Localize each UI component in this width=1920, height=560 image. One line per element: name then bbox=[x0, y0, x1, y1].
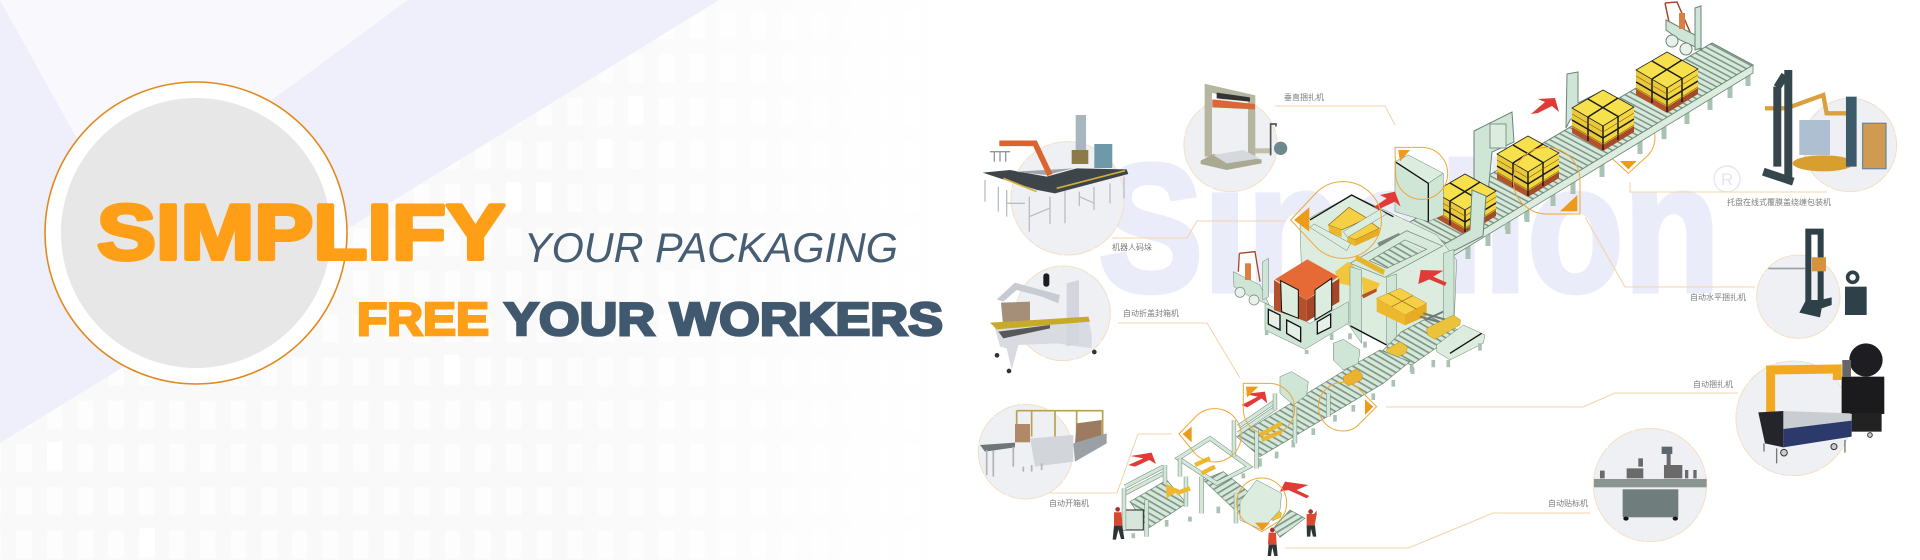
wrapped load bbox=[1799, 120, 1830, 155]
exit table bbox=[1273, 510, 1305, 537]
corner callout ring bbox=[1513, 147, 1580, 214]
callout ring with corner bbox=[1395, 147, 1448, 199]
yellow frame bbox=[1017, 411, 1103, 437]
reel bbox=[1849, 343, 1883, 377]
columns bbox=[1124, 393, 1328, 537]
cross bed bbox=[1203, 472, 1250, 517]
label: auto strapping: 自动捆扎机 bbox=[1693, 379, 1733, 389]
black base line bbox=[1351, 326, 1387, 345]
strapping frame b bbox=[1474, 112, 1514, 238]
gripper bbox=[990, 152, 1010, 162]
background: pale grid panel bbox=[0, 0, 1000, 560]
arm bbox=[1255, 148, 1272, 153]
product: horizontal strapping machine bbox=[1757, 232, 1867, 338]
side table black rail bbox=[1450, 333, 1482, 353]
output conveyor bbox=[1380, 317, 1462, 365]
callout ring a bbox=[1179, 409, 1241, 462]
monitor bbox=[1662, 447, 1672, 454]
dark side bbox=[1758, 411, 1783, 447]
table bbox=[1213, 150, 1260, 163]
yellow arch bbox=[1771, 369, 1837, 417]
control panel bbox=[1842, 360, 1851, 377]
lower conveyor line bbox=[1113, 339, 1413, 556]
base bbox=[1201, 154, 1262, 170]
body bbox=[1030, 435, 1073, 467]
leader lines bbox=[1050, 106, 1827, 548]
title: free: FREE bbox=[357, 293, 489, 345]
white rail left bbox=[1310, 224, 1351, 251]
cabinet bbox=[1623, 489, 1678, 517]
table centre bbox=[1015, 168, 1073, 175]
central stacking cell bbox=[1233, 147, 1526, 372]
pallet 3 bbox=[1572, 90, 1634, 151]
base bbox=[1072, 150, 1088, 164]
worker right bbox=[1307, 509, 1317, 537]
wheels bbox=[995, 350, 1097, 373]
flap carton bbox=[1075, 420, 1102, 443]
frame bbox=[1208, 88, 1252, 157]
output legs bbox=[1350, 333, 1480, 372]
stacker back plate bbox=[1300, 195, 1457, 350]
label: robot palletizing: 机器人码垛 bbox=[1112, 242, 1152, 252]
arm bbox=[1765, 95, 1850, 113]
feed unit bbox=[1280, 372, 1308, 405]
legs bbox=[987, 447, 1042, 477]
yellow rail bbox=[990, 317, 1090, 329]
blue body bbox=[1783, 421, 1852, 447]
background: light triangle bbox=[0, 0, 408, 213]
legs bbox=[985, 177, 1124, 232]
product: case sealer bbox=[990, 266, 1110, 373]
red arrow c bbox=[1280, 482, 1309, 498]
column bbox=[1350, 267, 1362, 343]
stacker rollers bbox=[1368, 237, 1423, 270]
small box group bbox=[1427, 315, 1461, 339]
product: case erector bbox=[978, 404, 1107, 499]
stacker gripper shadow bbox=[1378, 235, 1400, 245]
left column bbox=[1763, 70, 1793, 182]
red arrow b bbox=[1242, 392, 1267, 407]
callout ring d bbox=[1237, 478, 1287, 532]
rollers bbox=[998, 325, 1050, 338]
pallet store base bbox=[1265, 302, 1348, 349]
wall body bbox=[995, 320, 1092, 370]
column bbox=[1387, 274, 1397, 347]
product: vertical strapping machine bbox=[1184, 88, 1287, 192]
callout ring c bbox=[1318, 382, 1377, 431]
black lower bbox=[1852, 413, 1882, 432]
watermark: registered mark bbox=[1714, 166, 1740, 192]
upper dark bbox=[1043, 273, 1049, 287]
red arrow lower bbox=[1418, 270, 1447, 286]
base bbox=[1799, 297, 1832, 317]
background: lavender diagonal band bbox=[0, 0, 719, 443]
cabinet bbox=[1094, 144, 1112, 168]
wheels bbox=[1781, 433, 1872, 456]
subtitle: your packaging: YOUR PACKAGING bbox=[524, 224, 898, 271]
dispenser post bbox=[1271, 124, 1276, 155]
head bbox=[1812, 257, 1826, 271]
pallet 2 bbox=[1497, 136, 1559, 197]
cabinet bbox=[1845, 287, 1867, 315]
conveyor bed bbox=[1388, 43, 1753, 262]
red arrow bbox=[1531, 98, 1559, 114]
pallet stack bbox=[1274, 259, 1339, 322]
red arrow a bbox=[1128, 453, 1156, 467]
label: auto labeling: 自动贴标机 bbox=[1548, 498, 1588, 508]
red arrow upper bbox=[1373, 192, 1401, 209]
forklift bbox=[1665, 2, 1702, 55]
black body bbox=[1842, 377, 1884, 414]
label: vertical strapping: 垂直捆扎机 bbox=[1284, 92, 1324, 102]
circle emblem bbox=[45, 82, 347, 384]
frame bbox=[1808, 232, 1821, 310]
feed unit 2 bbox=[1333, 339, 1360, 370]
carton bbox=[1015, 424, 1030, 442]
callout ring behind pallet bbox=[1602, 111, 1655, 173]
table bbox=[1768, 268, 1805, 269]
lower boxes bbox=[1377, 288, 1427, 325]
column bbox=[1067, 280, 1079, 347]
column bbox=[1076, 115, 1086, 153]
out slope bbox=[1073, 433, 1107, 462]
small box on line bbox=[1387, 342, 1407, 358]
strapping post a bbox=[1566, 72, 1600, 128]
reel bbox=[1848, 272, 1858, 282]
boxes upper bbox=[1328, 207, 1379, 246]
product: pallet wrapper bbox=[1763, 70, 1897, 192]
callout ring b bbox=[1243, 383, 1295, 435]
upper arm bbox=[997, 283, 1060, 303]
carton bbox=[1343, 368, 1363, 386]
turntable bbox=[1793, 155, 1854, 171]
left bed bbox=[1130, 480, 1187, 528]
upper conveyor line bbox=[1388, 2, 1753, 270]
legs bbox=[1764, 440, 1845, 463]
watermark: brand name: Sinolion bbox=[1098, 126, 1720, 330]
labeler unit bbox=[1240, 480, 1282, 530]
robot arm bbox=[999, 143, 1050, 175]
pallet 4 bbox=[1636, 52, 1698, 113]
product: auto strapping machine bbox=[1736, 343, 1884, 476]
wrapper tower bbox=[1395, 155, 1443, 222]
legs bbox=[1133, 367, 1413, 538]
feet bbox=[1623, 517, 1678, 521]
machine frame front bbox=[1430, 190, 1486, 258]
gripper fork bbox=[1420, 312, 1447, 323]
head dark bbox=[1217, 93, 1250, 102]
callout ring with pointer bbox=[1291, 182, 1381, 258]
small carton bbox=[1267, 508, 1282, 521]
stacker top frame bbox=[1310, 195, 1393, 220]
worker front bbox=[1268, 528, 1278, 556]
white rail right bbox=[1343, 209, 1387, 237]
square frame bbox=[1178, 438, 1249, 483]
label heads bbox=[1600, 454, 1697, 478]
conveyor lower rail bbox=[1430, 65, 1753, 270]
label: horizontal strapping: 自动水平捆扎机 bbox=[1690, 292, 1746, 302]
in-feed bbox=[980, 443, 1015, 452]
label: wrapper: 托盘在线式覆膜盖绕缠包装机 bbox=[1727, 197, 1831, 207]
legs bbox=[1267, 213, 1526, 354]
pallet 1 bbox=[1434, 174, 1496, 235]
conveyor legs bbox=[1468, 72, 1748, 259]
product: robot palletizer bbox=[983, 115, 1128, 255]
watermark: registered mark: R bbox=[1721, 170, 1733, 189]
mid boxes bbox=[1335, 255, 1385, 298]
upper rails bbox=[1125, 402, 1275, 493]
table bbox=[983, 168, 1128, 193]
label: auto erector: 自动开箱机 bbox=[1049, 498, 1089, 508]
carton bbox=[1001, 302, 1030, 328]
cabinet bbox=[1863, 123, 1886, 169]
right column bbox=[1846, 97, 1857, 167]
worker left bbox=[1113, 507, 1124, 540]
column bbox=[1443, 249, 1454, 327]
label: auto flap sealer: 自动折盖封箱机 bbox=[1123, 308, 1179, 318]
forklift bbox=[1233, 252, 1269, 305]
case stack cage bbox=[1123, 510, 1143, 530]
flat cartons bbox=[1177, 423, 1282, 493]
side table bbox=[1437, 325, 1485, 360]
product: labeling machine bbox=[1593, 428, 1707, 542]
table top bbox=[1760, 411, 1852, 429]
roof ring bbox=[1350, 231, 1443, 277]
conveyor bbox=[1594, 479, 1707, 487]
folded carton bbox=[1166, 484, 1180, 498]
head band bbox=[1212, 99, 1255, 109]
title: your workers: YOUR WORKERS bbox=[504, 293, 943, 345]
yellow rails bbox=[1003, 171, 1125, 192]
reel bbox=[1274, 142, 1287, 155]
title: simplify: SIMPLIFY bbox=[97, 188, 505, 276]
main diagonal bed bbox=[1237, 350, 1410, 457]
